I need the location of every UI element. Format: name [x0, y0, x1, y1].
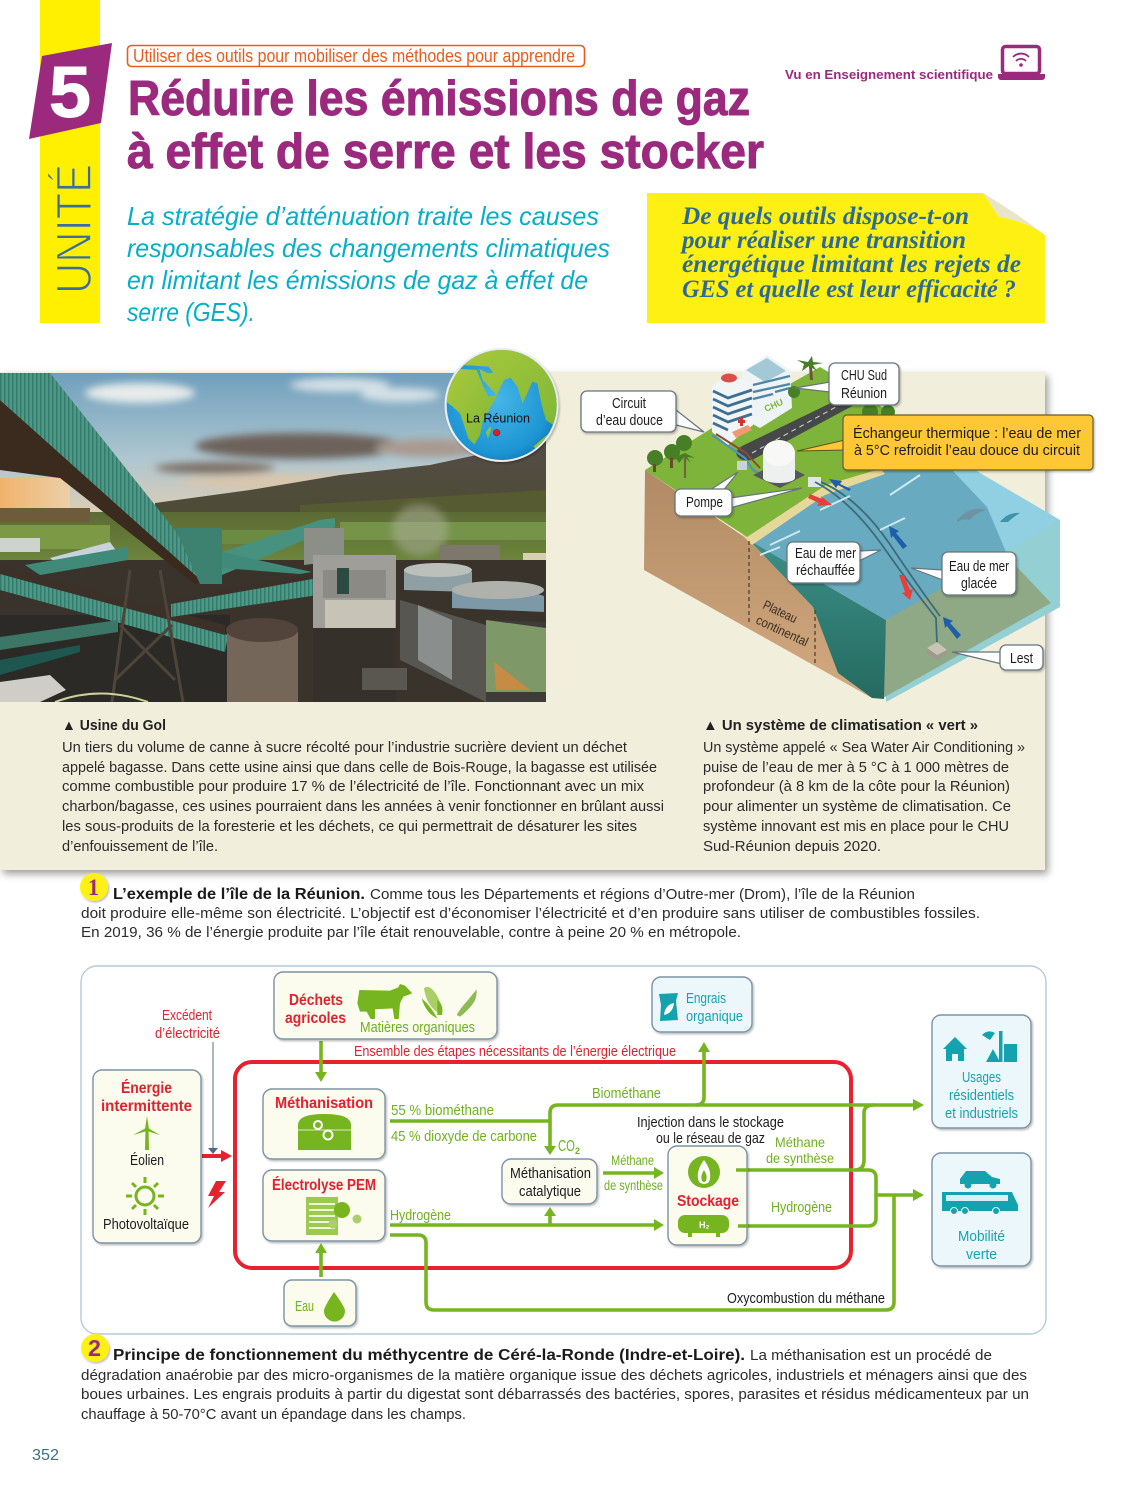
- land: [645, 367, 950, 537]
- callout: pompe: [675, 472, 802, 516]
- factory ground: [0, 560, 546, 702]
- callout: lest: [952, 645, 1043, 670]
- callout: échangeur thermique: à 5°C refroidit l’eau douce du circuit: [854, 442, 1081, 459]
- globe: location of La Réunion: La Réunion: [466, 410, 530, 425]
- injection label: ou le réseau de gaz: [656, 1130, 765, 1147]
- box: stockage: Stockage: [677, 1193, 739, 1210]
- oxycombustion label: Oxycombustion du méthane: [727, 1290, 885, 1307]
- question panel: GES et quelle est leur efficacité ?: [682, 276, 1016, 303]
- distant low buildings: [0, 538, 40, 552]
- box: électrolyse: Électrolyse PEM: [272, 1175, 376, 1194]
- callout: eau de mer glacée: [911, 552, 1016, 595]
- intro text: responsables des changements climatiques: [127, 233, 610, 263]
- box: déchets agricoles: [274, 972, 497, 1039]
- road: [736, 400, 856, 460]
- box: mobilité verte: verte: [966, 1246, 997, 1263]
- box: eau: [284, 1280, 356, 1326]
- icon: factory: [982, 1031, 1017, 1062]
- trees: [647, 356, 895, 478]
- intro text: en limitant les émissions de gaz à effet de: [127, 265, 588, 295]
- flow labels: 45 % dioxyde de carbone: [391, 1128, 537, 1145]
- steel frame: [112, 570, 183, 702]
- caption: climatisation verte: [703, 718, 1025, 855]
- caption: climatisation verte: Sud-Réunion depuis 2020.: [703, 839, 881, 855]
- box: énergie intermittente: Photovoltaïque: [103, 1216, 189, 1233]
- badge: 1: 1: [88, 875, 99, 900]
- box: énergie intermittente: [93, 1070, 201, 1243]
- surplus label: d’électricité: [155, 1026, 220, 1042]
- callout: échangeur thermique: [797, 415, 1093, 470]
- title: [127, 72, 764, 179]
- question panel: De quels outils dispose-t-on: [681, 203, 969, 230]
- caption: climatisation verte: puise de l’eau de mer à 5 °C à 1 000 mètres de: [703, 760, 1009, 776]
- badge: 2: [81, 1334, 109, 1362]
- globe: location of La Réunion: [444, 347, 558, 462]
- digital resource mention: [785, 46, 1045, 82]
- caption: usine du Gol: Un tiers du volume de canne à sucre récolté pour l’industrie sucrière devient un déchet: [62, 740, 627, 756]
- front water face: [749, 540, 886, 699]
- caption: climatisation verte: pour alimenter un système de climatisation. Ce: [703, 799, 1011, 815]
- document 1 text: En 2019, 36 % de l’énergie produite par l’île était renouvelable, contre à peine 20 % en métropole.: [81, 925, 741, 941]
- red cross and awning: [738, 417, 745, 426]
- concrete base and exchanger tank: [753, 462, 805, 488]
- badge: 2: 2: [88, 1335, 101, 1361]
- intro text: [127, 201, 610, 327]
- document 2 text: boues urbaines. Les engrais produits à partir du digestat sont débarrassés des bactéries, spores, parasites et résidus médicamenteux par un: [81, 1387, 1029, 1403]
- caption: usine du Gol: appelé bagasse. Dans cette usine ainsi que dans celle de Bois-Rouge, la bagasse est utilisée: [62, 760, 657, 776]
- callout: eau de mer glacée: Eau de mer: [949, 558, 1009, 575]
- green flow lines: [315, 1041, 924, 1310]
- intro text: La stratégie d’atténuation traite les causes: [127, 201, 599, 231]
- method tag: Utiliser des outils pour mobiliser des méthodes pour apprendre: [133, 46, 575, 66]
- box: stockage: [668, 1146, 748, 1245]
- schema: climatisation block diagram: [581, 355, 1093, 702]
- box: énergie intermittente: Énergie: [121, 1078, 172, 1097]
- dolphins: [957, 509, 987, 522]
- callout: pompe: Pompe: [686, 494, 723, 511]
- plateau continental label: continental: [754, 612, 811, 649]
- icon: fertilizer bag: [659, 993, 678, 1021]
- icon: lightning: [208, 1181, 226, 1208]
- box: mobilité verte: Mobilité: [958, 1228, 1005, 1245]
- document 2 text: La méthanisation est un procédé de: [750, 1348, 992, 1364]
- icon: cow: [357, 984, 412, 1019]
- flow arrows: [808, 479, 961, 639]
- question panel: pour réaliser une transition: [680, 227, 966, 254]
- document 2 text: [81, 1334, 1029, 1423]
- caption: climatisation verte: système innovant est mis en place pour le CHU: [703, 819, 1009, 835]
- sea block right face and seabed: [886, 520, 1060, 702]
- box: engrais organique: Engrais: [686, 990, 726, 1007]
- question panel: [647, 193, 1045, 323]
- page number: 352: [32, 1447, 59, 1464]
- photo: usine du Gol: [0, 373, 546, 702]
- icon: house: [943, 1037, 967, 1061]
- injection label: [637, 1114, 784, 1147]
- front building: [712, 375, 753, 445]
- document 1 text: L’exemple de l’île de la Réunion.: [113, 886, 365, 903]
- unit label: UNITÉ: [46, 164, 102, 294]
- panel: documents background: [0, 372, 1045, 870]
- sea surface: [749, 470, 1060, 620]
- surplus label: Excédent: [162, 1008, 212, 1024]
- document 1 text: doit produire elle-même son électricité. L’objectif est d’économiser l’électricité et d’en produire sans utiliser de combustibles fossiles.: [81, 906, 980, 922]
- tanks: [404, 570, 472, 592]
- flow labels: Biométhane: [592, 1085, 661, 1102]
- document 1 text: [80, 873, 980, 941]
- callout: circuit d'eau douce: Circuit: [612, 395, 647, 412]
- caption: usine du Gol: ▲ Usine du Gol: [62, 718, 166, 734]
- caption: climatisation verte: ▲ Un système de climatisation « vert »: [703, 718, 978, 734]
- document 2 text: Principe de fonctionnement du méthycentre de Céré-la-Ronde (Indre-et-Loire).: [113, 1347, 745, 1364]
- icon: corn: [422, 987, 442, 1018]
- Africa: [446, 369, 497, 444]
- flow labels: [390, 1085, 834, 1224]
- box: usages résidentiels et industriels: résidentiels: [949, 1087, 1014, 1104]
- beach: [742, 468, 885, 545]
- pipes: [712, 435, 775, 482]
- wave highlights: [760, 475, 920, 555]
- back building: [742, 355, 792, 428]
- flow labels: Hydrogène: [771, 1199, 832, 1216]
- box: électrolyse: [263, 1170, 385, 1241]
- plateau continental label: Plateau: [761, 597, 800, 626]
- caption: usine du Gol: comme combustible pour produire 17 % de l’électricité de l’île. Fonctionnant avec un mix: [62, 779, 645, 795]
- unit number badge: [29, 43, 112, 139]
- icon: hydrogen tank: H₂: [699, 1220, 710, 1230]
- Australia: [533, 433, 549, 448]
- callout: CHU Sud Réunion: Réunion: [841, 385, 887, 402]
- injection label: Injection dans le stockage: [637, 1114, 784, 1131]
- Eurasia with Arabia and India: [461, 347, 558, 425]
- icon: wind turbine: [133, 1116, 160, 1150]
- icon: flame: [688, 1156, 720, 1188]
- box: engrais organique: organique: [686, 1008, 743, 1025]
- intro text: serre (GES).: [127, 297, 255, 327]
- flow labels: de synthèse: [766, 1150, 834, 1166]
- box: usages résidentiels et industriels: [932, 1015, 1031, 1128]
- box: déchets agricoles: agricoles: [285, 1010, 346, 1027]
- callout: CHU Sud Réunion: [795, 363, 899, 405]
- box: usages résidentiels et industriels: et industriels: [945, 1105, 1018, 1122]
- box: méthanisation: [263, 1089, 385, 1159]
- flow labels: Méthane: [611, 1152, 654, 1168]
- unit band: [40, 0, 102, 323]
- question panel: énergétique limitant les rejets de: [682, 251, 1021, 278]
- icon: bus: [942, 1192, 1018, 1214]
- icon: digester: [298, 1114, 351, 1150]
- caption: climatisation verte: Un système appelé « Sea Water Air Conditioning »: [703, 740, 1025, 756]
- caption: usine du Gol: d’enfouissement de l’île.: [62, 839, 218, 855]
- caption: usine du Gol: charbon/bagasse, ces usines pourraient dans les années à venir fonctionner en brûlant aussi: [62, 799, 664, 815]
- callout: eau de mer réchauffée: réchauffée: [796, 562, 855, 579]
- flow labels: Méthane: [775, 1134, 825, 1150]
- flow labels: CO: [558, 1138, 575, 1155]
- tower block: [313, 555, 396, 628]
- document 2 text: dégradation anaérobie par des micro-organismes de la matière organique issue des déchets agricoles, industriels et ménagers ainsi que des: [81, 1368, 1027, 1384]
- icon: car: [960, 1171, 1000, 1188]
- title: Réduire les émissions de gaz: [128, 72, 750, 126]
- callout: eau de mer réchauffée: [787, 542, 881, 583]
- plateau continental label: [749, 541, 815, 665]
- icon: electrolyser: [306, 1197, 362, 1235]
- silo: [227, 625, 298, 702]
- box: eau: Eau: [295, 1298, 314, 1315]
- callout: CHU Sud Réunion: CHU Sud: [841, 367, 887, 384]
- flow labels: 55 % biométhane: [391, 1102, 494, 1119]
- box: engrais organique: [652, 977, 752, 1032]
- cliff: [644, 470, 879, 702]
- submarine pipeline: [815, 482, 937, 643]
- badge: 1: [80, 873, 108, 901]
- flow labels: de synthèse: [604, 1177, 663, 1193]
- icon: drop: [324, 1292, 345, 1322]
- document 1 text: Comme tous les Départements et régions d’Outre-mer (Drom), l’île de la Réunion: [370, 887, 915, 903]
- surplus arrow: [208, 1042, 218, 1154]
- document 2 text: chauffage à 50-70°C avant un épandage dans les champs.: [81, 1407, 466, 1423]
- box: énergie intermittente: Éolien: [130, 1152, 164, 1169]
- box: usages résidentiels et industriels: Usages: [962, 1069, 1001, 1086]
- caption: usine du Gol: [62, 718, 664, 855]
- conveyors: [0, 400, 206, 584]
- callout: circuit d'eau douce: d’eau douce: [596, 412, 663, 429]
- callout: lest: Lest: [1010, 650, 1034, 667]
- title: à effet de serre et les stocker: [127, 125, 764, 179]
- icon: sun: [126, 1177, 164, 1215]
- box: déchets agricoles: Matières organiques: [360, 1019, 475, 1036]
- box: mobilité verte: [932, 1153, 1031, 1266]
- box: déchets agricoles: Déchets: [289, 992, 343, 1009]
- flow labels: Hydrogène: [390, 1207, 451, 1224]
- callout: eau de mer glacée: glacée: [961, 575, 997, 592]
- schema: climatisation block diagram: CHU: [763, 397, 785, 414]
- icon: laptop with wifi: [998, 46, 1045, 80]
- surplus label: [155, 1008, 220, 1042]
- red boundary: [235, 1062, 851, 1268]
- Madagascar: [486, 427, 491, 438]
- box: méthanisation catalytique: catalytique: [519, 1183, 581, 1200]
- digital resource mention: Vu en Enseignement scientifique: [785, 67, 993, 82]
- icon: wheat: [457, 989, 477, 1017]
- box: méthanisation catalytique: Méthanisation: [510, 1165, 591, 1182]
- callout: circuit d'eau douce: [581, 391, 704, 432]
- box: énergie intermittente: intermittente: [101, 1098, 192, 1115]
- flow labels: 2: [575, 1146, 580, 1156]
- box: méthanisation: Méthanisation: [275, 1095, 373, 1112]
- flow chart: méthycentre: [81, 966, 1046, 1334]
- box: méthanisation catalytique: [502, 1159, 597, 1204]
- callout: eau de mer réchauffée: Eau de mer: [795, 545, 856, 562]
- caption: climatisation verte: profondeur (à 8 km de la côte pour la Réunion): [703, 779, 1010, 795]
- boundary label: Ensemble des étapes nécessitants de l’énergie électrique: [354, 1043, 676, 1060]
- caption: usine du Gol: les sous-produits de la foresterie et les déchets, ce qui permettrait de désaturer les sites: [62, 819, 637, 835]
- callout: échangeur thermique: Échangeur thermique : l’eau de mer: [853, 425, 1081, 442]
- weight: [927, 642, 947, 658]
- electricity arrow: [202, 1150, 232, 1162]
- unit number badge: 5: [49, 53, 91, 133]
